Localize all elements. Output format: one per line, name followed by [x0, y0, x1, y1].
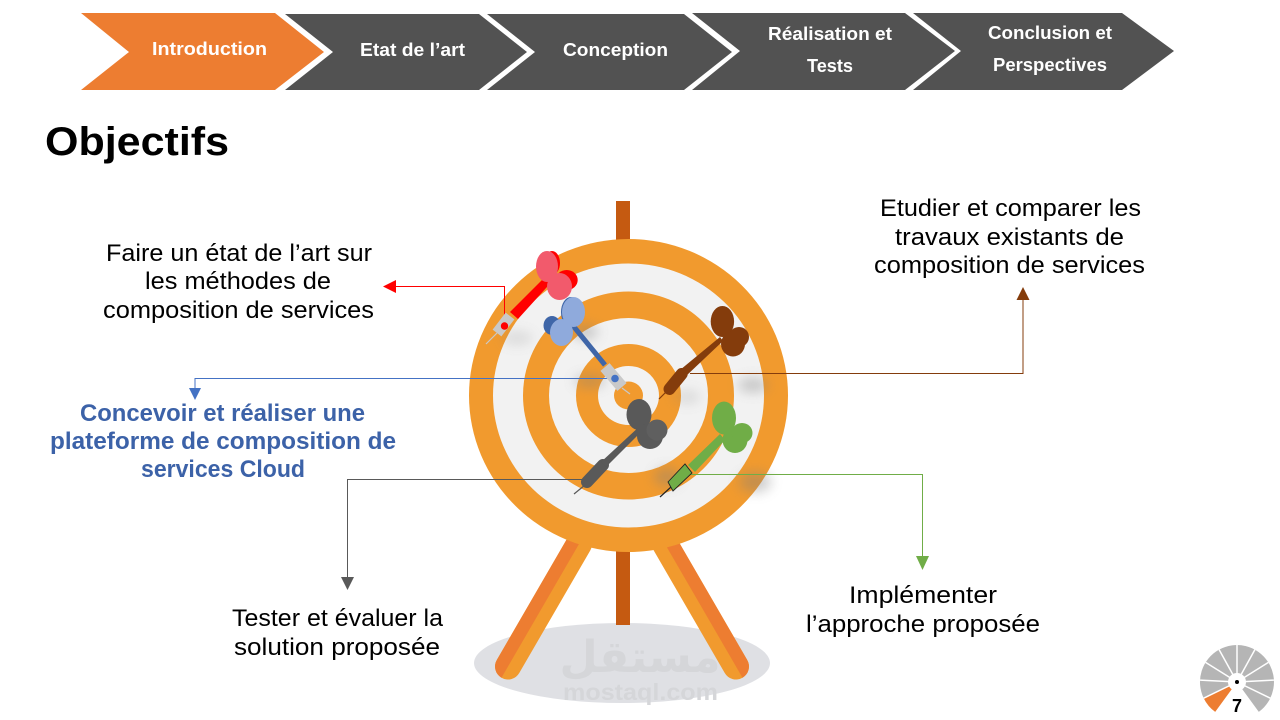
step: Conclusion et Perspectives: Conclusion et — [988, 23, 1112, 43]
gauge: active segment — [1204, 682, 1237, 712]
text: concevoir et réaliser: services Cloud — [141, 456, 305, 483]
dart: green — [660, 402, 752, 497]
dart: brown — [659, 306, 749, 399]
text: implémenter — [806, 582, 1040, 638]
watermark: mostaql.com — [563, 679, 718, 705]
target rings — [469, 239, 788, 552]
step: Introduction: Introduction — [152, 39, 267, 59]
text: tester et évaluer: solution proposée — [234, 634, 440, 661]
step: Réalisation et Tests: Tests — [807, 56, 853, 76]
connector: grey — [341, 480, 585, 590]
text: implémenter: Implémenter — [849, 582, 997, 609]
dart: grey — [574, 399, 668, 494]
step: Conclusion et Perspectives: Perspectives — [993, 55, 1107, 75]
connector: brown — [690, 287, 1030, 374]
connector: blue — [189, 378, 615, 400]
dart: red — [486, 251, 578, 344]
dart shadows — [501, 325, 771, 492]
connector: green — [690, 474, 929, 570]
text: étudier et comparer: Etudier et comparer les — [880, 195, 1141, 222]
watermark: مستقل — [560, 632, 720, 683]
text: faire un état de l'art — [103, 240, 374, 324]
connector: red — [383, 280, 504, 326]
step: Etat de l'art — [285, 14, 527, 90]
step: Conclusion et Perspectives — [913, 13, 1174, 90]
step: Etat de l'art: Etat de l’art — [360, 40, 465, 60]
text: étudier et comparer: travaux existants de — [895, 224, 1124, 251]
text: tester et évaluer: Tester et évaluer la — [232, 605, 444, 632]
watermark — [560, 632, 720, 705]
right leg — [665, 538, 749, 678]
dart: blue — [544, 297, 630, 394]
centre post — [616, 201, 630, 625]
text: concevoir et réaliser — [50, 400, 396, 483]
text: concevoir et réaliser: Concevoir et réaliser une — [80, 400, 365, 427]
text: étudier et comparer — [874, 195, 1145, 279]
step: Conception: Conception — [563, 40, 668, 60]
text: étudier et comparer: composition de services — [874, 252, 1145, 279]
ground shadow — [474, 623, 770, 703]
page number: 7 — [1232, 696, 1242, 716]
text: faire un état de l'art: Faire un état de l’art sur — [106, 240, 372, 267]
text: concevoir et réaliser: plateforme de composition de — [50, 428, 396, 455]
target stand — [474, 201, 770, 703]
progress gauge — [1200, 645, 1274, 716]
step: Conception — [487, 14, 732, 90]
title: Objectifs — [45, 120, 229, 164]
step: Introduction — [81, 13, 324, 90]
navigation bar — [81, 13, 1174, 90]
step: Réalisation et Tests — [692, 13, 955, 90]
step: Réalisation et Tests: Réalisation et — [768, 24, 892, 44]
left leg — [495, 538, 579, 678]
text: faire un état de l'art: les méthodes de — [145, 268, 331, 295]
text: tester et évaluer — [232, 605, 444, 661]
text: implémenter: l’approche proposée — [806, 611, 1040, 638]
text: faire un état de l'art: composition de services — [103, 297, 374, 324]
